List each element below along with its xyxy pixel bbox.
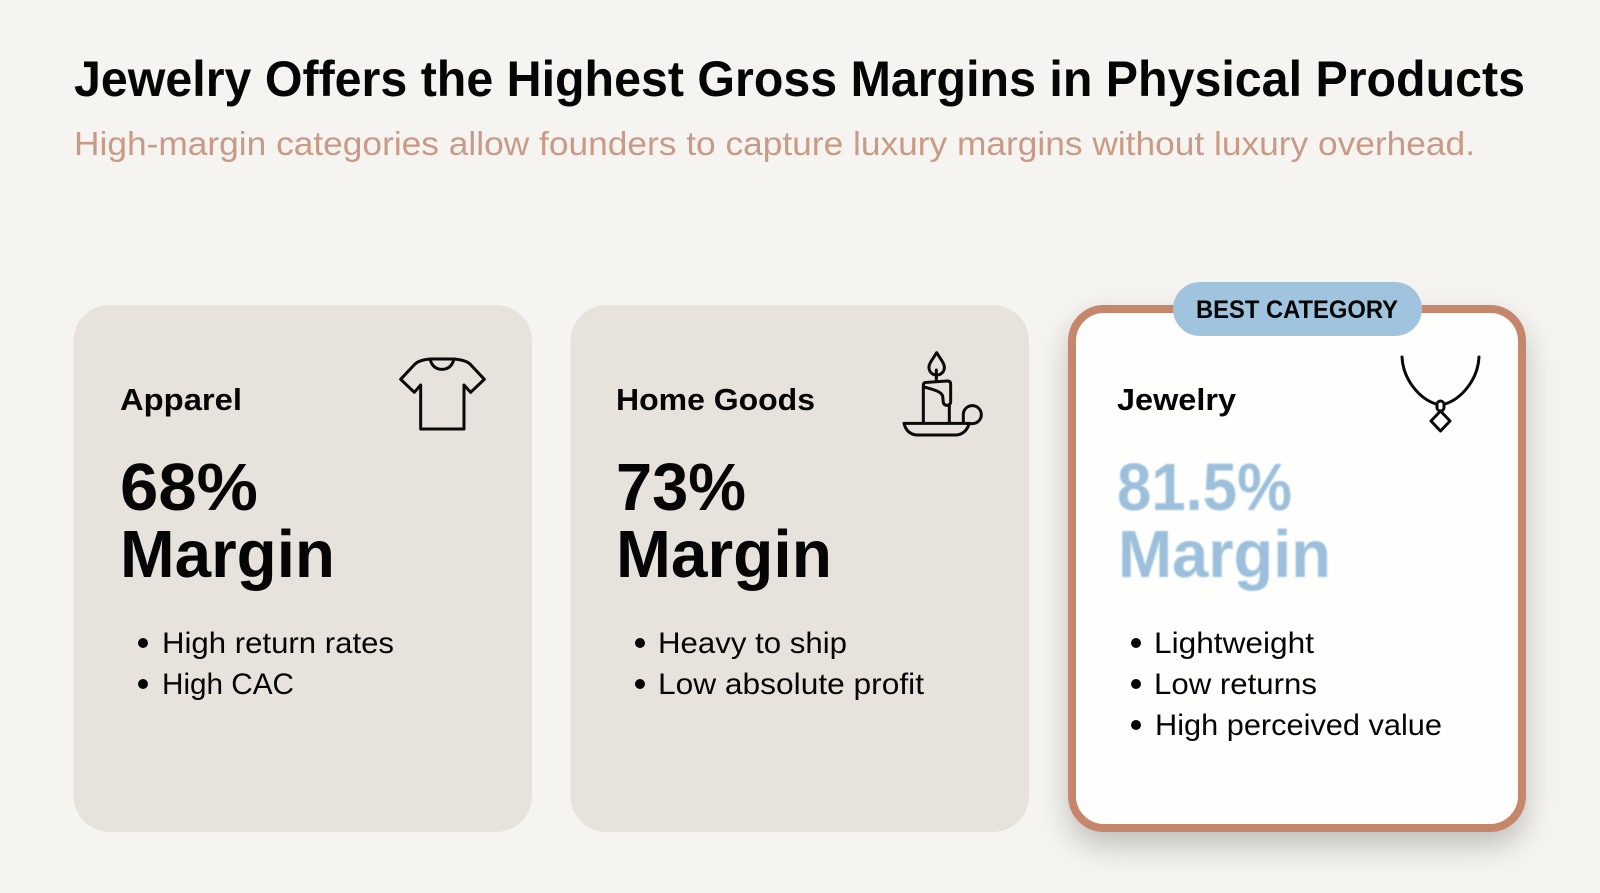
- bullet list: jewelry: High perceived value: [1155, 709, 1442, 742]
- card background: jewelry: [1072, 309, 1522, 828]
- margin figure: jewelry: [1117, 450, 1331, 592]
- bullet list: apparel: [138, 627, 394, 701]
- margin figure: home goods: [616, 450, 832, 592]
- badge: best category: BEST CATEGORY: [1196, 296, 1398, 324]
- bullet list: home goods: Low absolute profit: [658, 668, 925, 701]
- bullet list: jewelry: Lightweight: [1154, 627, 1315, 660]
- bullet list: home goods: Heavy to ship: [658, 627, 847, 660]
- card background: apparel: [74, 305, 532, 832]
- icon: candle: [904, 353, 981, 435]
- bullet list: home goods: [635, 627, 925, 701]
- bullet list: apparel: High return rates: [162, 627, 394, 660]
- subtitle: High-margin categories allow founders to capture luxury margins without luxury overhead.: [74, 125, 1475, 162]
- heading: apparel: Apparel: [120, 382, 242, 417]
- icon: necklace: [1402, 357, 1479, 431]
- card background: home goods: [570, 305, 1029, 832]
- panel: apparel: [74, 305, 532, 832]
- bullet list: apparel: High CAC: [162, 668, 294, 701]
- margin figure: home goods: Margin: [616, 517, 832, 592]
- margin figure: apparel: [120, 450, 335, 592]
- margin figure: home goods: 73%: [616, 450, 746, 525]
- title: Jewelry Offers the Highest Gross Margins in Physical Products: [74, 51, 1525, 107]
- heading: home goods: Home Goods: [616, 382, 815, 417]
- icon: t-shirt: [401, 359, 484, 429]
- heading: jewelry: Jewelry: [1117, 382, 1237, 417]
- bullet list: jewelry: Low returns: [1154, 668, 1317, 701]
- margin figure: jewelry: Margin: [1118, 517, 1331, 592]
- panel: jewelry: [1072, 282, 1522, 828]
- badge: best category: [1173, 282, 1422, 336]
- panel: home goods: [570, 305, 1029, 832]
- margin figure: apparel: 68%: [120, 450, 258, 525]
- margin figure: apparel: Margin: [120, 517, 335, 592]
- bullet list: jewelry: [1131, 627, 1442, 742]
- margin figure: jewelry: 81.5%: [1117, 450, 1292, 525]
